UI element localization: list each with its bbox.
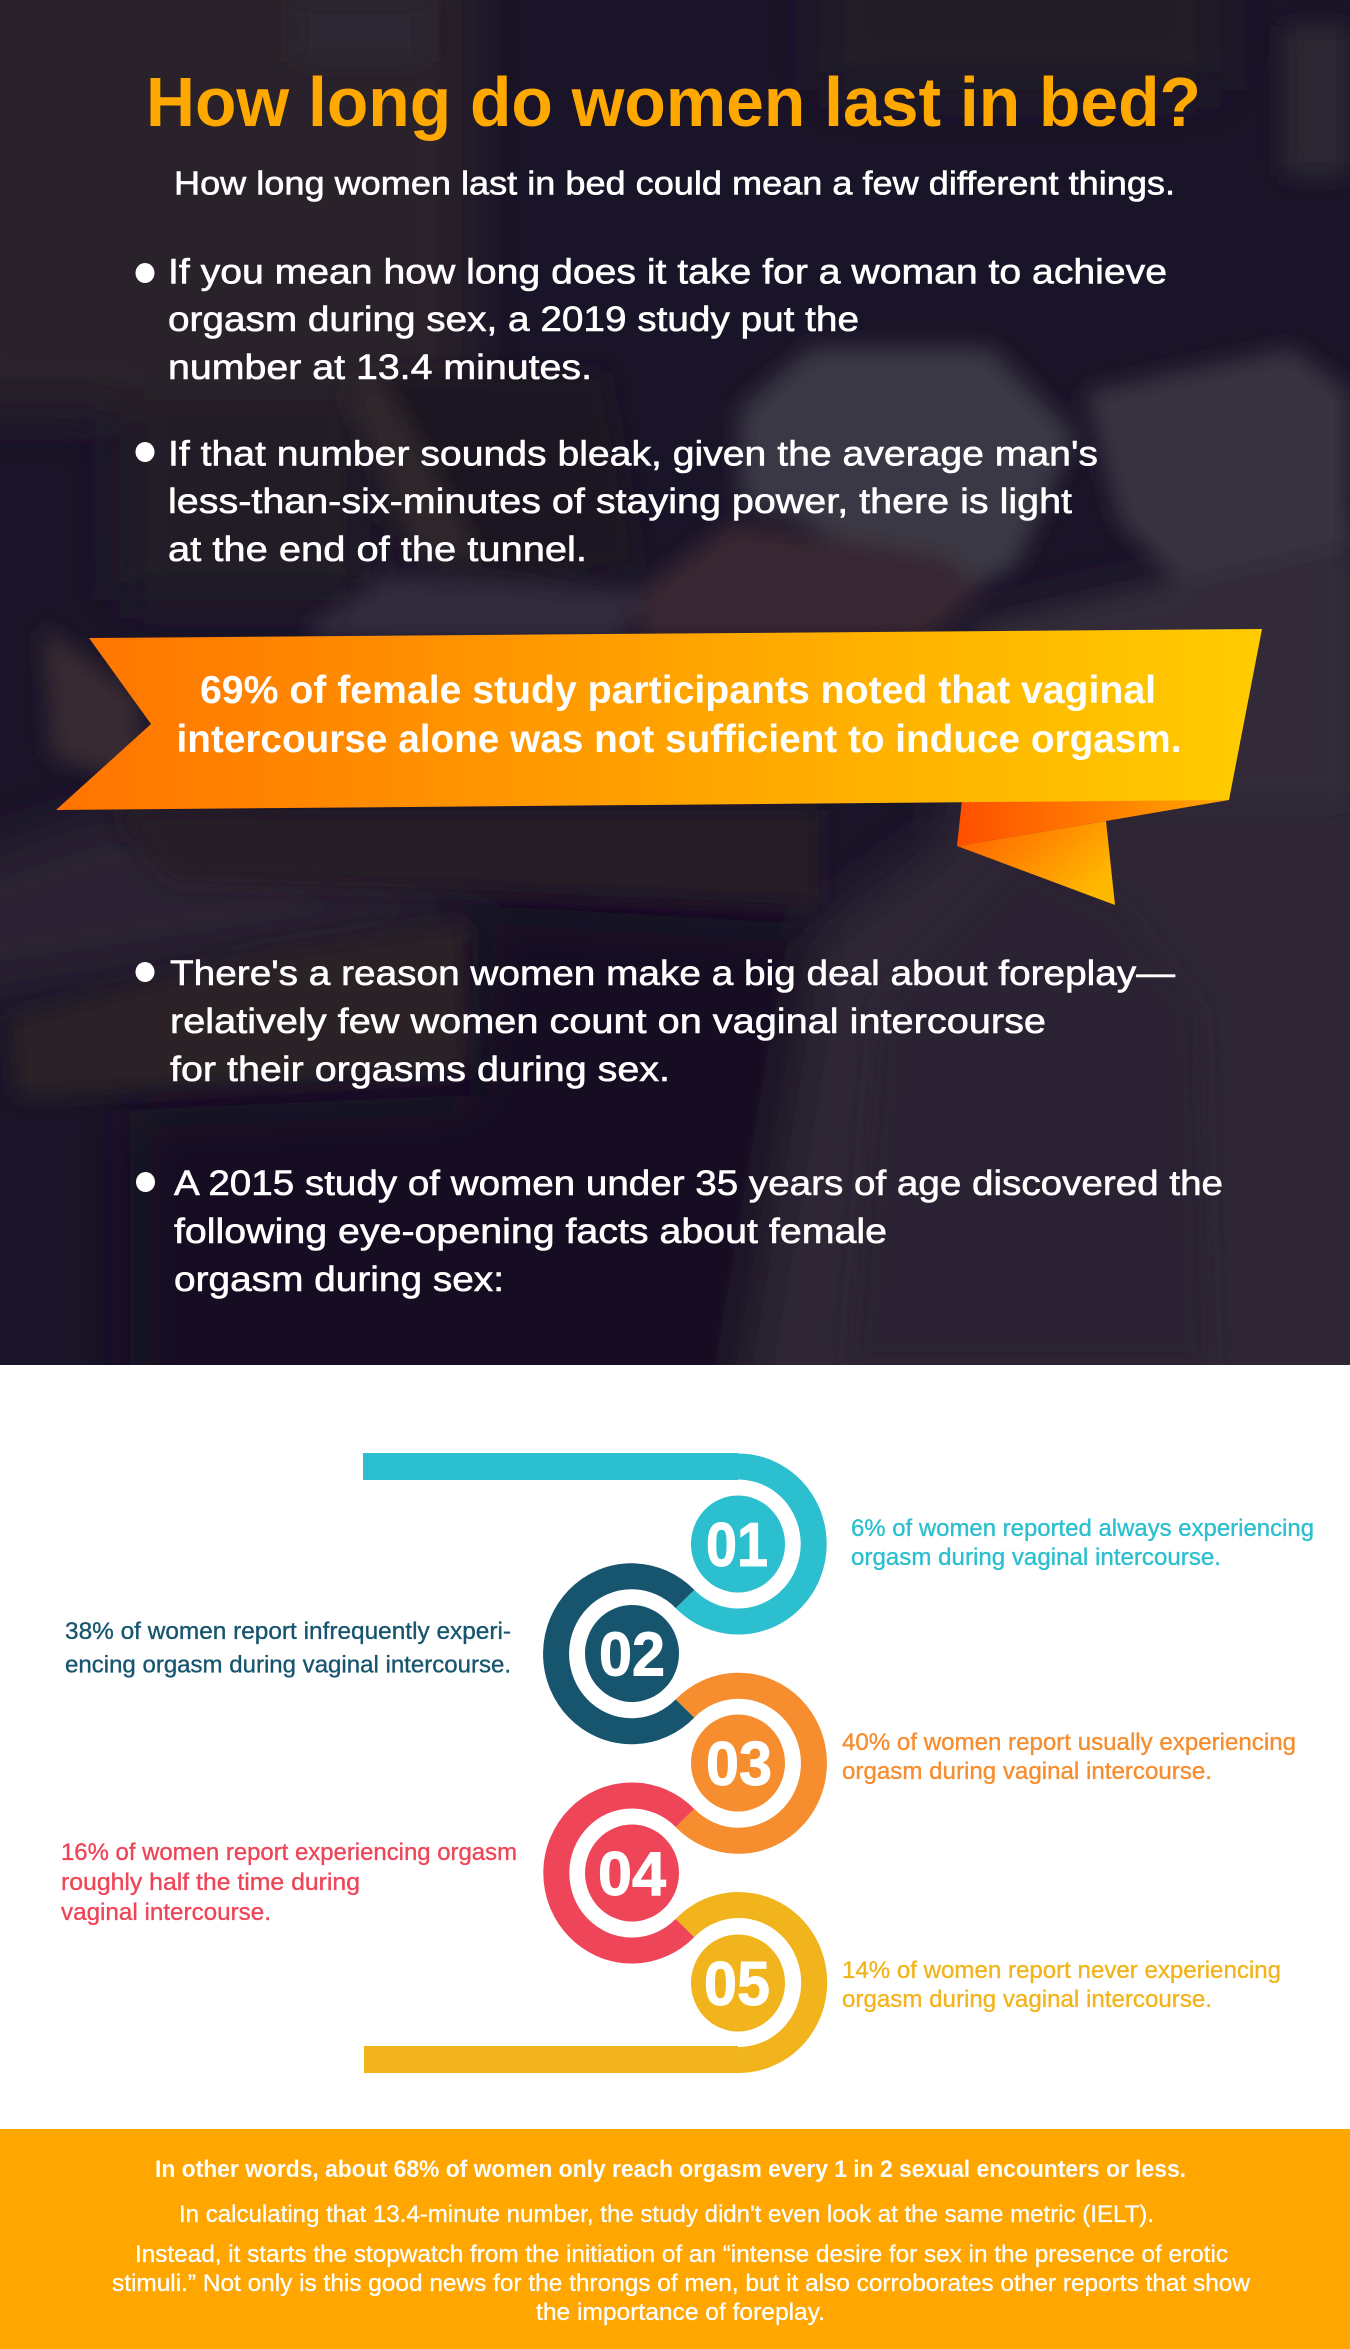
panel: numbered chain diagram: [363, 1453, 814, 2073]
ribbon fold: [957, 800, 1229, 846]
step 04 ring: [556, 1796, 685, 1951]
bullet paragraph 3: for their orgasms during sex.: [170, 1050, 670, 1089]
ribbon band: [56, 629, 1262, 810]
footer paragraph: [112, 2241, 1251, 2326]
label 01: [851, 1515, 1314, 1571]
bullet paragraph 3: relatively few women count on vaginal intercourse: [170, 1002, 1046, 1041]
ribbon tail: [957, 821, 1115, 905]
label 02: 38% of women report infrequently experi-: [65, 1618, 511, 1645]
bullet paragraph 1: If you mean how long does it take for a woman to achieve: [168, 252, 1167, 292]
bullet paragraph 3: There's a reason women make a big deal about foreplay—: [170, 954, 1175, 993]
bullet paragraph 4: [136, 1164, 1223, 1299]
bullet paragraph 1: number at 13.4 minutes.: [168, 348, 592, 387]
label 01: orgasm during vaginal intercourse.: [851, 1544, 1221, 1571]
panel: orange footer: [0, 2129, 1350, 2349]
step 02 ring: [556, 1576, 685, 1731]
intro line: How long women last in bed could mean a few different things.: [174, 164, 1175, 202]
footer paragraph: stimuli.” Not only is this good news for the throngs of men, but it also corroborates other reports that show: [112, 2270, 1251, 2297]
title: How long do women last in bed?: [146, 63, 1201, 141]
step 03 ring: 03: [706, 1730, 772, 1799]
bullet paragraph 4: orgasm during sex:: [174, 1260, 504, 1299]
bullet paragraph 2: at the end of the tunnel.: [168, 530, 587, 569]
label 03: 40% of women report usually experiencing: [842, 1729, 1296, 1756]
footer bold statement: In other words, about 68% of women only reach orgasm every 1 in 2 sexual encounters or less.: [155, 2156, 1186, 2183]
bullet paragraph 3: [136, 954, 1175, 1089]
label 02: encing orgasm during vaginal intercourse.: [65, 1652, 511, 1678]
step 02 ring: 02: [599, 1620, 665, 1690]
label 04: 16% of women report experiencing orgasm: [61, 1839, 517, 1866]
ribbon text: [176, 669, 1182, 761]
ribbon text: 69% of female study participants noted that vaginal: [200, 669, 1156, 712]
bullet paragraph 4: following eye-opening facts about female: [174, 1212, 887, 1251]
footer paragraph: Instead, it starts the stopwatch from the initiation of an “intense desire for sex in the presence of erotic: [135, 2241, 1228, 2268]
label 04: vaginal intercourse.: [61, 1899, 271, 1926]
label 05: 14% of women report never experiencing: [842, 1957, 1281, 1984]
ribbon callout: [56, 629, 1262, 905]
label 04: [61, 1839, 517, 1926]
footer line: In calculating that 13.4-minute number, the study didn't even look at the same metric (IELT).: [179, 2201, 1154, 2228]
label 03: [842, 1729, 1296, 1785]
step 05 ring: [364, 1905, 814, 2073]
ribbon text: intercourse alone was not sufficient to induce orgasm.: [176, 718, 1182, 761]
label 02: [65, 1618, 511, 1678]
label 04: roughly half the time during: [61, 1869, 360, 1896]
label 05: orgasm during vaginal intercourse.: [842, 1986, 1212, 2013]
label 05: [842, 1957, 1281, 2013]
bullet paragraph 2: If that number sounds bleak, given the average man's: [168, 434, 1098, 474]
bullet paragraph 2: [136, 434, 1098, 569]
step 05 ring: 05: [704, 1950, 770, 2019]
bullet paragraph 4: A 2015 study of women under 35 years of age discovered the: [174, 1164, 1223, 1203]
step 01 ring: 01: [706, 1511, 768, 1580]
bullet paragraph 2: less-than-six-minutes of staying power, there is light: [168, 482, 1072, 521]
bullet paragraph 1: orgasm during sex, a 2019 study put the: [168, 300, 859, 339]
bullet paragraph 1: [136, 252, 1167, 387]
step 01 ring: [363, 1453, 814, 1621]
footer paragraph: the importance of foreplay.: [536, 2299, 825, 2326]
step 04 ring: 04: [598, 1840, 667, 1909]
label 03: orgasm during vaginal intercourse.: [842, 1758, 1212, 1785]
step 03 ring: [685, 1686, 814, 1841]
label 01: 6% of women reported always experiencing: [851, 1515, 1314, 1542]
panel: dark hero photo background: [0, 0, 1350, 1420]
